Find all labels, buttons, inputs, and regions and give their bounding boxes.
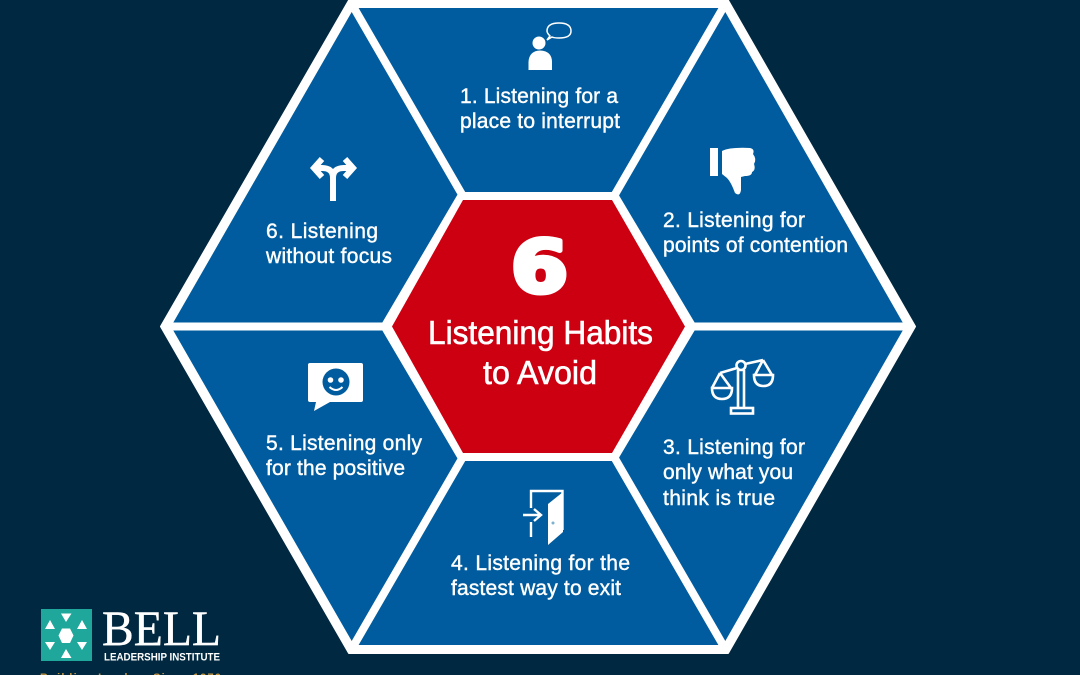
icon: smiley speech bubble [308, 363, 363, 411]
text: habit 6: 6. Listening [266, 220, 378, 243]
logo subtitle: LEADERSHIP INSTITUTE [104, 652, 220, 664]
hexagon diagram [161, 0, 915, 653]
panel 4: exit: fastest way to exit [451, 577, 621, 600]
center heading: Listening Habits [428, 314, 653, 351]
icon: teal logo square [41, 609, 92, 661]
text: habit 1: 1. Listening for a [460, 85, 618, 108]
text: habit 2: 2. Listening for [663, 209, 805, 232]
panel 1: interrupt [460, 23, 620, 133]
text: habit 3: 3. Listening for [663, 436, 805, 459]
panel 4: exit [451, 491, 630, 600]
icon: split arrow [314, 159, 353, 201]
panel 2: contention [663, 148, 848, 257]
panel 5: positive [266, 363, 422, 480]
icon: balance scales [712, 360, 773, 414]
icon: thumbs down [710, 148, 755, 194]
panel 3: true: only what you [663, 461, 793, 484]
logo: Bell Leadership Institute [40, 600, 221, 675]
text: habit 5: 5. Listening only [266, 432, 422, 455]
panel 1: interrupt: place to interrupt [460, 110, 620, 133]
panel 6: without focus: without focus [265, 245, 392, 268]
logo wordmark: BELL [102, 600, 221, 656]
panel 3: true [663, 360, 805, 510]
icon: person with speech bubble [528, 23, 571, 70]
big number 6: 6 [511, 225, 568, 309]
panel 5: positive: for the positive [266, 457, 405, 480]
icon: door with arrow [523, 491, 563, 545]
panel 3: true: think is true [663, 487, 775, 510]
panel 2: contention: points of contention [663, 234, 848, 257]
panel 6: without focus [265, 159, 392, 268]
center heading line 2: to Avoid [483, 354, 597, 391]
text: habit 4: 4. Listening for the [451, 552, 630, 575]
panel: center red hexagon [392, 200, 685, 453]
